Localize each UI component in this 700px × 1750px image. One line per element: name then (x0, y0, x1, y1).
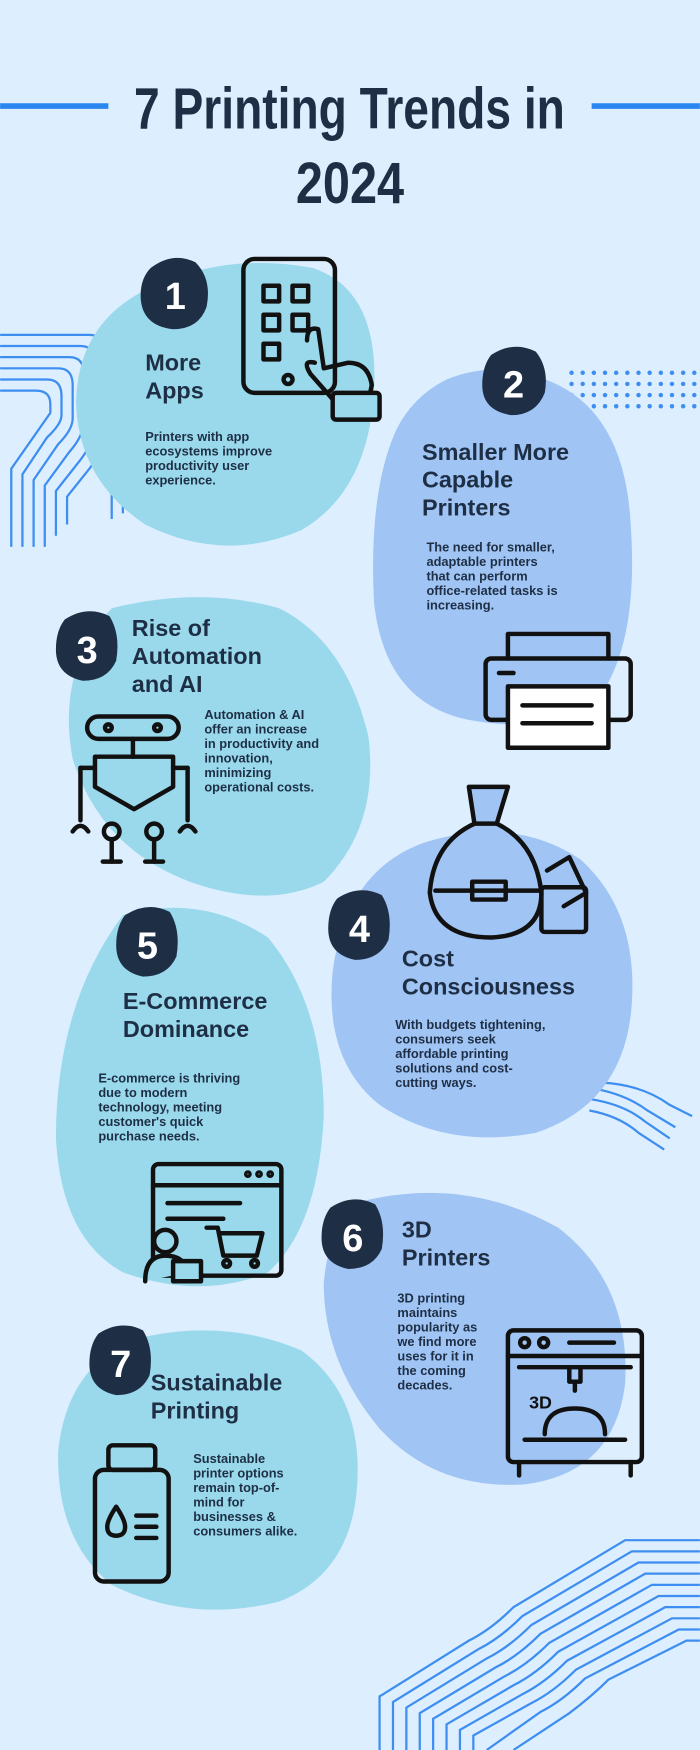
title: 2024 (296, 151, 404, 216)
panel 7: Sustainable Printing: remain top-of- (193, 1480, 279, 1495)
icon: 3D printer: 3D (529, 1392, 552, 1412)
icon: money bag (430, 787, 586, 938)
panel 3: Rise of Automation and AI: and AI (132, 671, 203, 697)
panel 4: Cost Consciousness: affordable printing (395, 1046, 509, 1061)
panel 1: More Apps: Apps (145, 377, 204, 403)
icon: online store (145, 1164, 281, 1281)
badge 4 (328, 890, 390, 960)
panel 3: Rise of Automation and AI: operational costs. (204, 779, 314, 794)
panel 4: Cost Consciousness (328, 787, 632, 1137)
panel 1: More Apps: productivity user (145, 458, 249, 473)
panel 3: Rise of Automation and AI: minimizing (204, 765, 271, 780)
panel 2: Smaller More Capable Printers: Printers (422, 495, 511, 521)
text: 3D printing (397, 1290, 465, 1305)
panel 3: Rise of Automation and AI: in productivity and (204, 736, 319, 751)
panel 6: 3D Printers: the coming (397, 1363, 466, 1378)
badge 5 (116, 907, 178, 977)
icon: tablet touch (243, 259, 380, 420)
panel 1: More Apps: experience. (145, 472, 216, 487)
panel 7: Sustainable Printing: consumers alike. (193, 1524, 297, 1539)
panel 5: E-Commerce Dominance: purchase needs. (98, 1129, 200, 1144)
panel 3: Rise of Automation and AI: offer an increase (204, 721, 307, 736)
badge 3: 3 (77, 630, 98, 672)
panel 1: More Apps: ecosystems improve (145, 443, 272, 458)
title (0, 76, 700, 216)
decorative circuits left (0, 335, 134, 547)
panel 5: E-Commerce Dominance: technology, meeting (98, 1100, 222, 1115)
panel 6: 3D Printers: decades. (397, 1378, 452, 1393)
panel 2: Smaller More Capable Printers (373, 347, 632, 748)
badge 6: 6 (342, 1218, 363, 1260)
panel 2: Smaller More Capable Printers: Capable (422, 467, 513, 493)
panel 5: E-Commerce Dominance: due to modern (98, 1085, 188, 1100)
panel 7: Sustainable Printing: printer options (193, 1466, 284, 1481)
text: The need for smaller, (426, 539, 555, 554)
badge 5: 5 (137, 926, 158, 968)
panel 2: Smaller More Capable Printers: adaptable printers (426, 554, 538, 569)
heading: Rise of (132, 615, 210, 641)
panel 2: Smaller More Capable Printers: office-related tasks is (426, 583, 558, 598)
text: Sustainable (193, 1451, 265, 1466)
panel 6: 3D Printers: we find more (396, 1334, 477, 1349)
decorative circuits bottom right (380, 1540, 700, 1750)
panel 6: 3D Printers: maintains (397, 1305, 457, 1320)
panel 5: E-Commerce Dominance: Dominance (123, 1016, 249, 1042)
text: E-commerce is thriving (98, 1071, 240, 1086)
panel 2: Smaller More Capable Printers: that can perform (426, 568, 528, 583)
panel 3: Rise of Automation and AI (56, 597, 370, 896)
panel 2: Smaller More Capable Printers: increasing. (426, 597, 494, 612)
panel 1: More Apps (76, 258, 380, 546)
badge 4: 4 (349, 909, 370, 951)
heading: More (145, 350, 201, 376)
icon: robot (73, 717, 195, 862)
panel 3: Rise of Automation and AI: Automation (132, 643, 262, 669)
text: With budgets tightening, (395, 1017, 545, 1032)
decorative circuits right middle (589, 1083, 692, 1150)
icon: printer (486, 634, 631, 748)
heading: Cost (402, 946, 454, 972)
badge 6 (322, 1199, 383, 1269)
panel 4: Cost Consciousness: consumers seek (395, 1032, 497, 1047)
text: Printers with app (145, 429, 249, 444)
heading: Sustainable (151, 1370, 282, 1396)
panel 7: Sustainable Printing (58, 1326, 358, 1610)
panel 3: Rise of Automation and AI: innovation, (204, 750, 273, 765)
badge 7: 7 (110, 1344, 131, 1386)
panel 5: E-Commerce Dominance (56, 907, 324, 1286)
badge 3 (56, 611, 117, 681)
panel 4: Cost Consciousness: cutting ways. (395, 1075, 476, 1090)
panel 6: 3D Printers: popularity as (397, 1319, 477, 1334)
panel 4: Cost Consciousness: Consciousness (402, 973, 575, 999)
title: 7 Printing Trends in (134, 76, 565, 141)
icon: ink bottle (95, 1445, 169, 1581)
panel 6: 3D Printers: Printers (402, 1245, 490, 1271)
badge 1 (141, 258, 208, 329)
text: Automation & AI (204, 707, 304, 722)
panel 4: Cost Consciousness: solutions and cost- (395, 1061, 513, 1076)
heading: 3D (402, 1217, 432, 1243)
panel 6: 3D Printers (322, 1193, 642, 1485)
panel 7: Sustainable Printing: businesses & (193, 1509, 276, 1524)
panel 7: Sustainable Printing: mind for (193, 1495, 245, 1510)
icon: 3D printer (508, 1330, 642, 1475)
heading: E-Commerce (123, 988, 267, 1014)
panel 5: E-Commerce Dominance: customer's quick (98, 1114, 204, 1129)
panel 7: Sustainable Printing: Printing (151, 1398, 239, 1424)
heading: Smaller More (422, 439, 569, 465)
badge 7 (89, 1326, 151, 1395)
badge 2 (482, 347, 546, 415)
panel 6: 3D Printers: uses for it in (397, 1348, 474, 1363)
badge 2: 2 (503, 364, 524, 406)
decorative dots top right (569, 371, 697, 408)
badge 1: 1 (165, 276, 186, 318)
